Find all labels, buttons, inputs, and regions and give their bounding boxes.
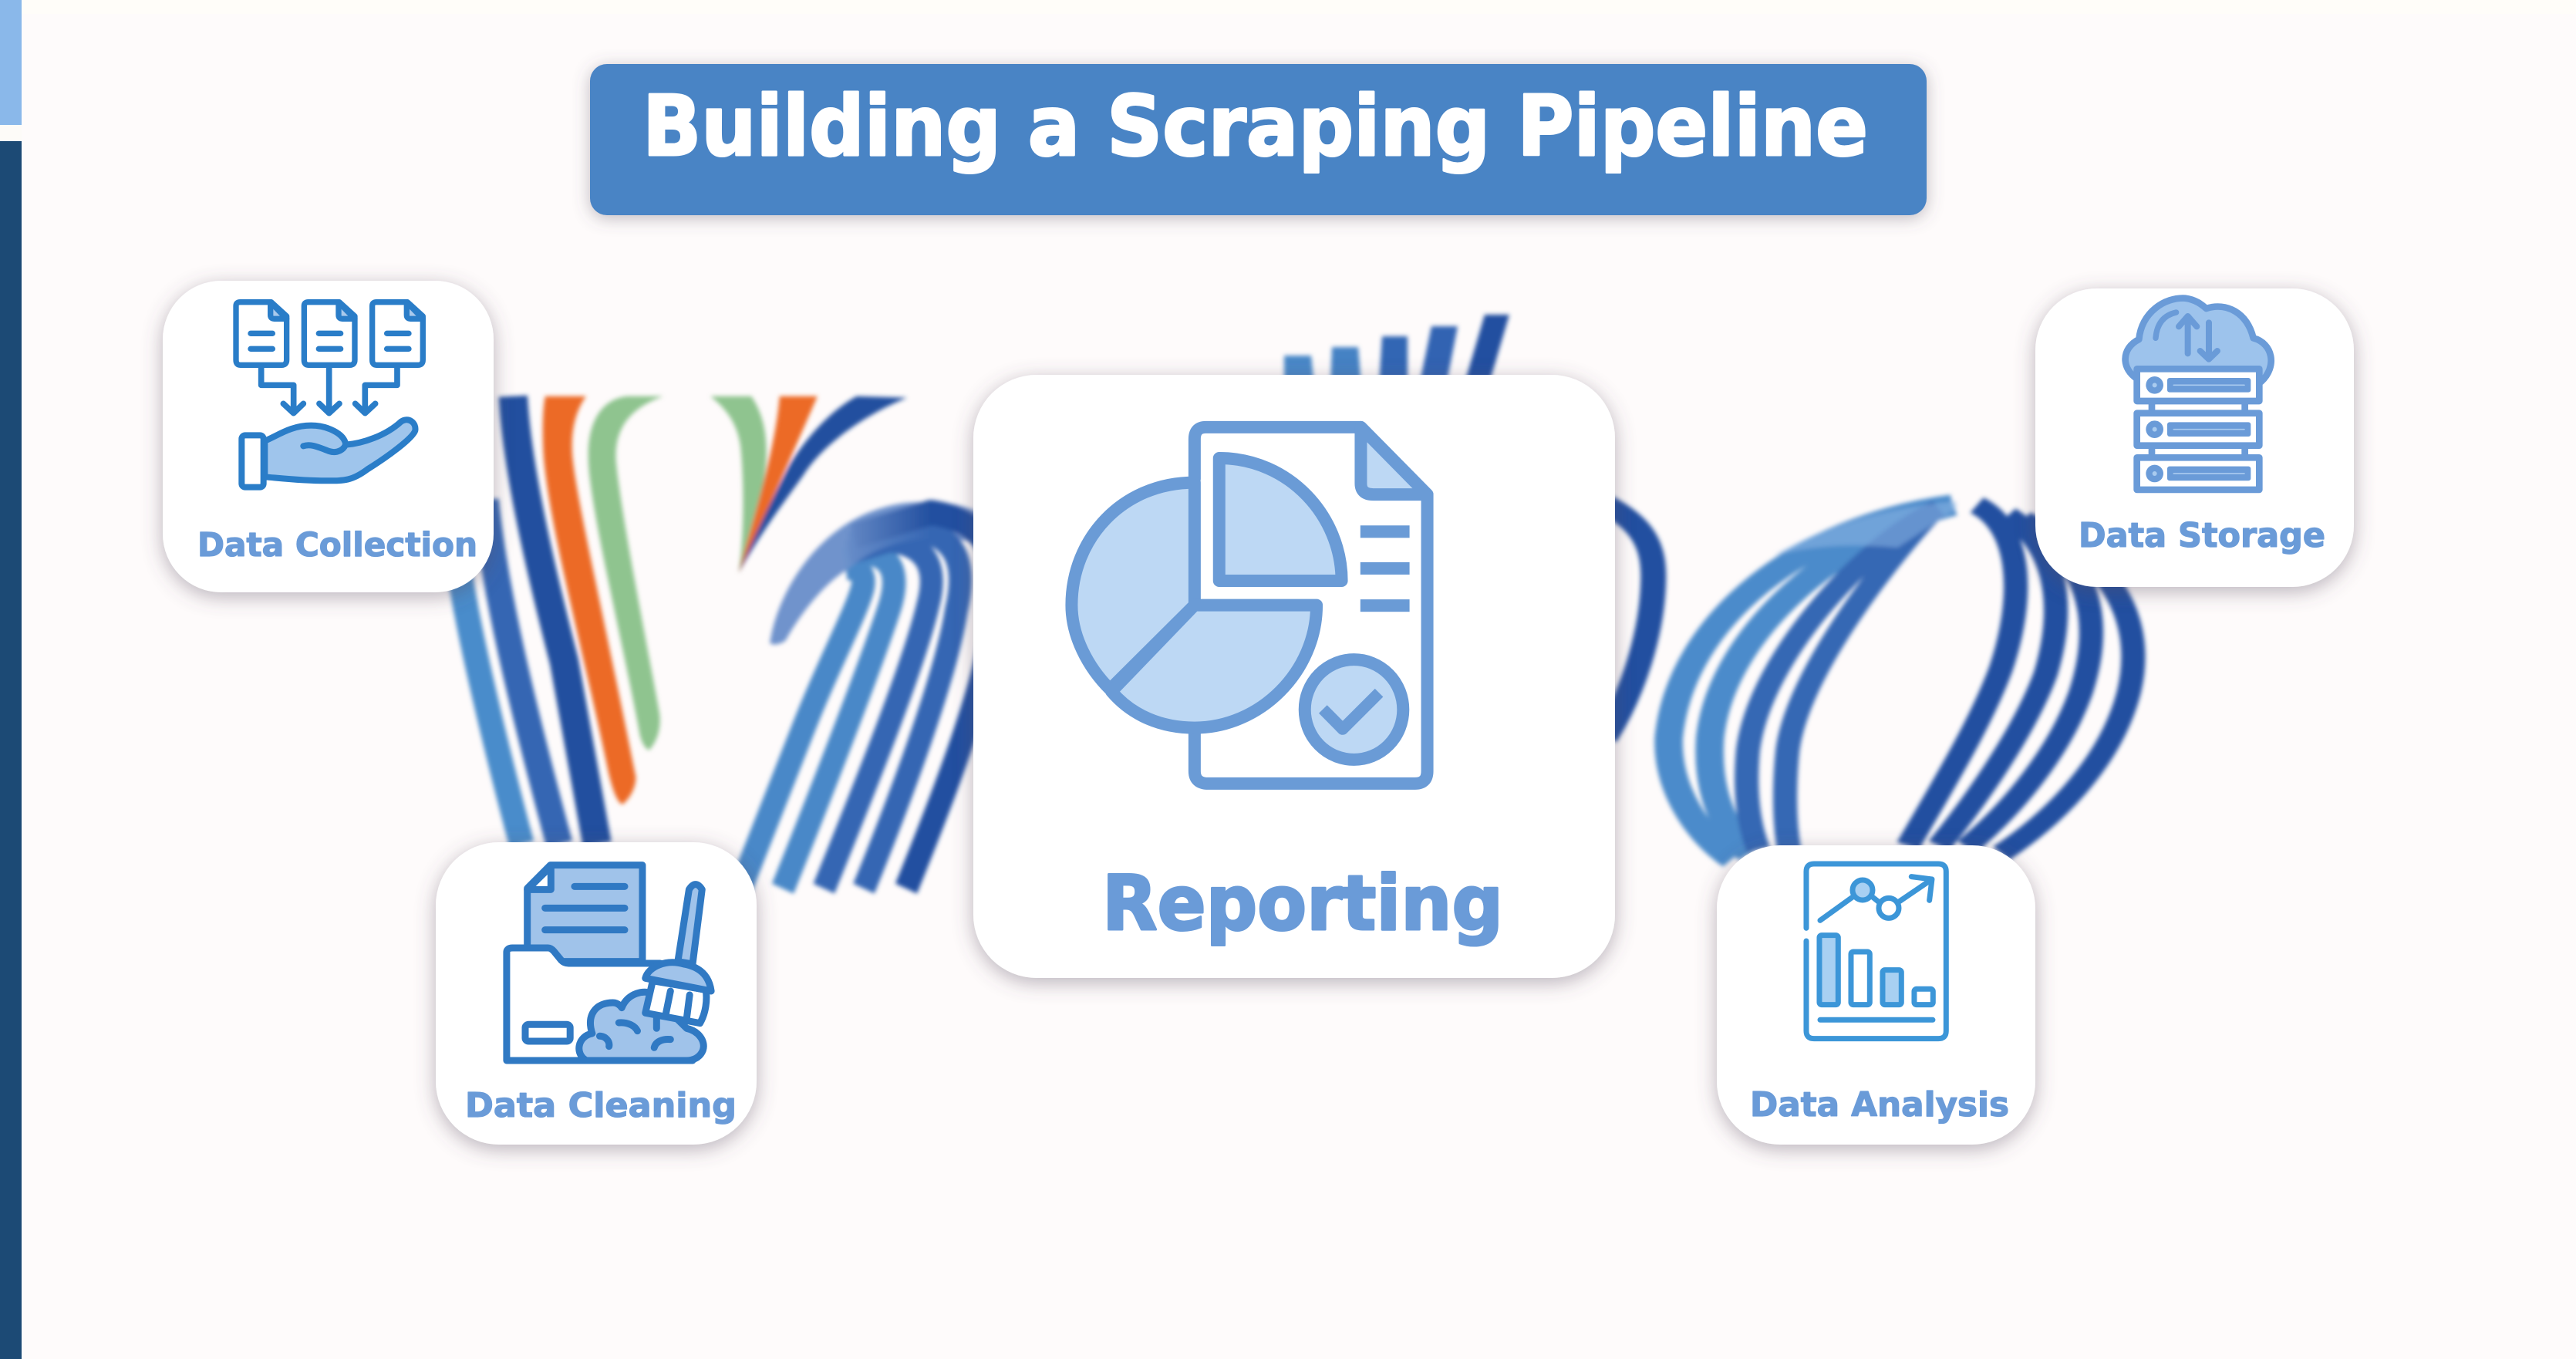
icon: report with pie chart xyxy=(1071,427,1428,784)
panel: reporting xyxy=(973,375,1615,978)
icon: documents into hand xyxy=(236,302,423,487)
label: data collection: Data Collection xyxy=(197,526,477,565)
icon: folder and broom xyxy=(507,865,711,1061)
blurred background logo xyxy=(460,315,2133,889)
logo letter V xyxy=(460,396,907,844)
label: data storage: Data Storage xyxy=(2079,516,2325,555)
label: data analysis: Data Analysis xyxy=(1750,1085,2009,1125)
logo top stripe ends xyxy=(1284,315,1509,386)
panel: data collection xyxy=(163,281,494,592)
title text: Building a Scraping Pipeline xyxy=(642,79,1868,175)
panel: data analysis xyxy=(1717,845,2035,1145)
left sidebar xyxy=(0,0,22,1359)
icon: cloud server xyxy=(2126,298,2271,490)
icon: report chart xyxy=(1806,864,1946,1039)
logo letter O and side stripe xyxy=(1605,501,2133,858)
panel: data cleaning xyxy=(436,842,757,1145)
label: reporting: Reporting xyxy=(1102,860,1503,948)
logo letter arch xyxy=(740,502,997,889)
label: data cleaning: Data Cleaning xyxy=(465,1086,737,1125)
panel: data storage xyxy=(2035,288,2354,587)
top strip xyxy=(0,0,2576,14)
title banner xyxy=(590,64,1927,215)
